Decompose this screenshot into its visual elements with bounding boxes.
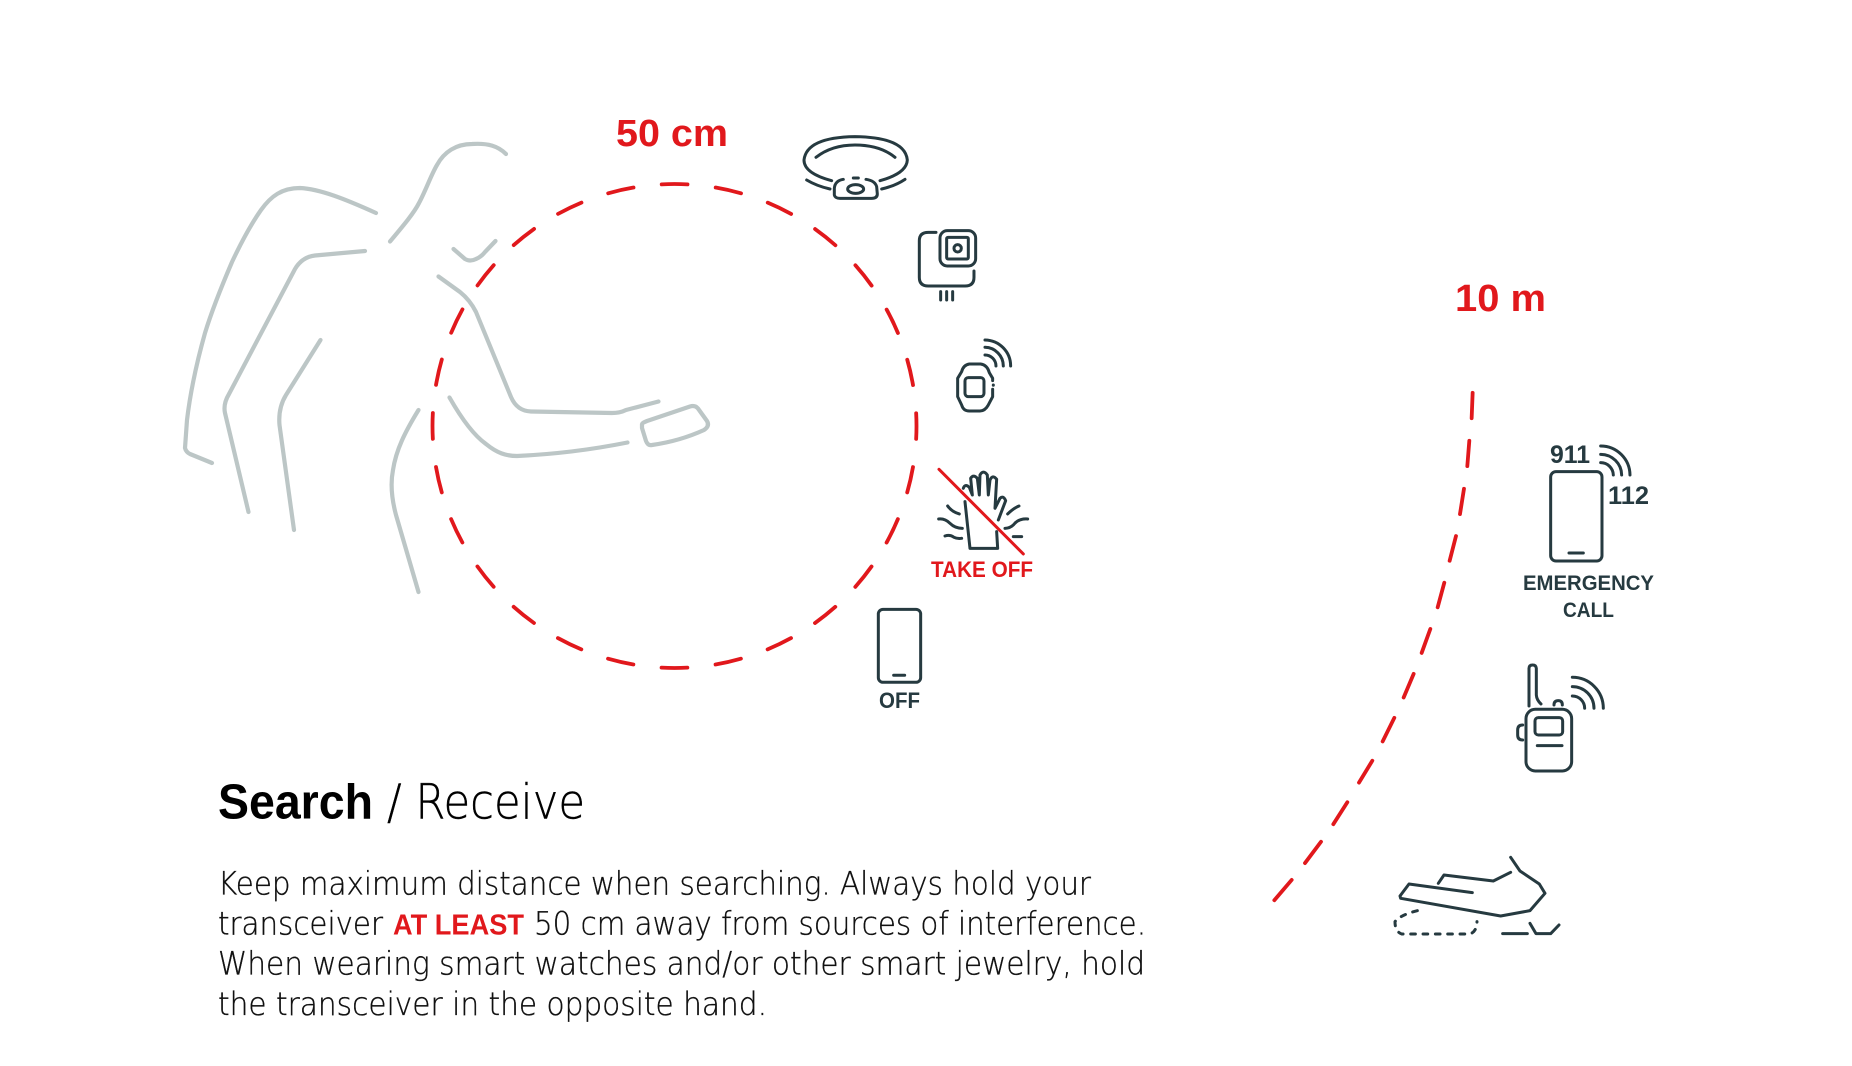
heading [218, 774, 585, 830]
body paragraph: AT LEAST [393, 910, 524, 942]
label: TAKE OFF: TAKE OFF [931, 557, 1033, 582]
body paragraph: transceiver [218, 904, 384, 942]
icon: snowmobile [1395, 857, 1559, 934]
icon: phone off [878, 609, 921, 682]
body paragraph: When wearing smart watches and/or other smart jewelry, hold [218, 944, 1145, 982]
label: OFF: OFF [879, 688, 920, 713]
label: 10 m: 10 m [1455, 278, 1546, 320]
icon: action camera [919, 231, 976, 300]
label: EMERGENCY CALL: EMERGENCY [1523, 572, 1654, 595]
icon: two-way radio [1518, 665, 1603, 771]
heading: / Receive [387, 774, 585, 830]
heading: Search [218, 776, 373, 830]
icon: headlamp [804, 137, 907, 198]
dashed 50 cm circle [432, 184, 916, 668]
body paragraph [218, 864, 1146, 1023]
label: 112: 112 [1608, 482, 1649, 510]
dashed 10 m arc [1274, 393, 1473, 900]
body paragraph: 50 cm away from sources of interference. [534, 904, 1146, 942]
label: EMERGENCY CALL: CALL [1563, 599, 1614, 622]
label: 911: 911 [1550, 441, 1590, 469]
hand outline and waves [939, 472, 1028, 548]
icon: emergency call phone [1551, 446, 1630, 561]
person silhouette holding transceiver [185, 144, 708, 592]
body paragraph: Keep maximum distance when searching. Always hold your [218, 864, 1092, 902]
label: 50 cm: 50 cm [616, 113, 728, 155]
label: EMERGENCY CALL [1523, 572, 1654, 622]
body paragraph: the transceiver in the opposite hand. [218, 985, 767, 1023]
icon: smart watch with signal [958, 340, 1011, 411]
icon: hand with jewelry, crossed out [939, 469, 1028, 554]
